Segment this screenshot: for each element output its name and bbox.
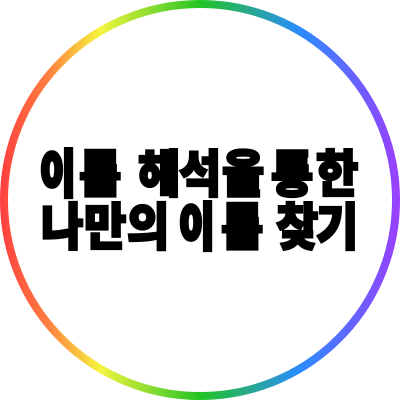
title line 2 bbox=[41, 199, 358, 257]
title line 1: 이 bbox=[40, 146, 76, 203]
title bbox=[40, 146, 358, 257]
title line 1: 름해석을통한 bbox=[79, 147, 358, 204]
title line 2: 이 bbox=[179, 199, 215, 256]
title line 2: 름찾기 bbox=[221, 200, 358, 257]
title line 2: 나만의 bbox=[41, 200, 169, 257]
